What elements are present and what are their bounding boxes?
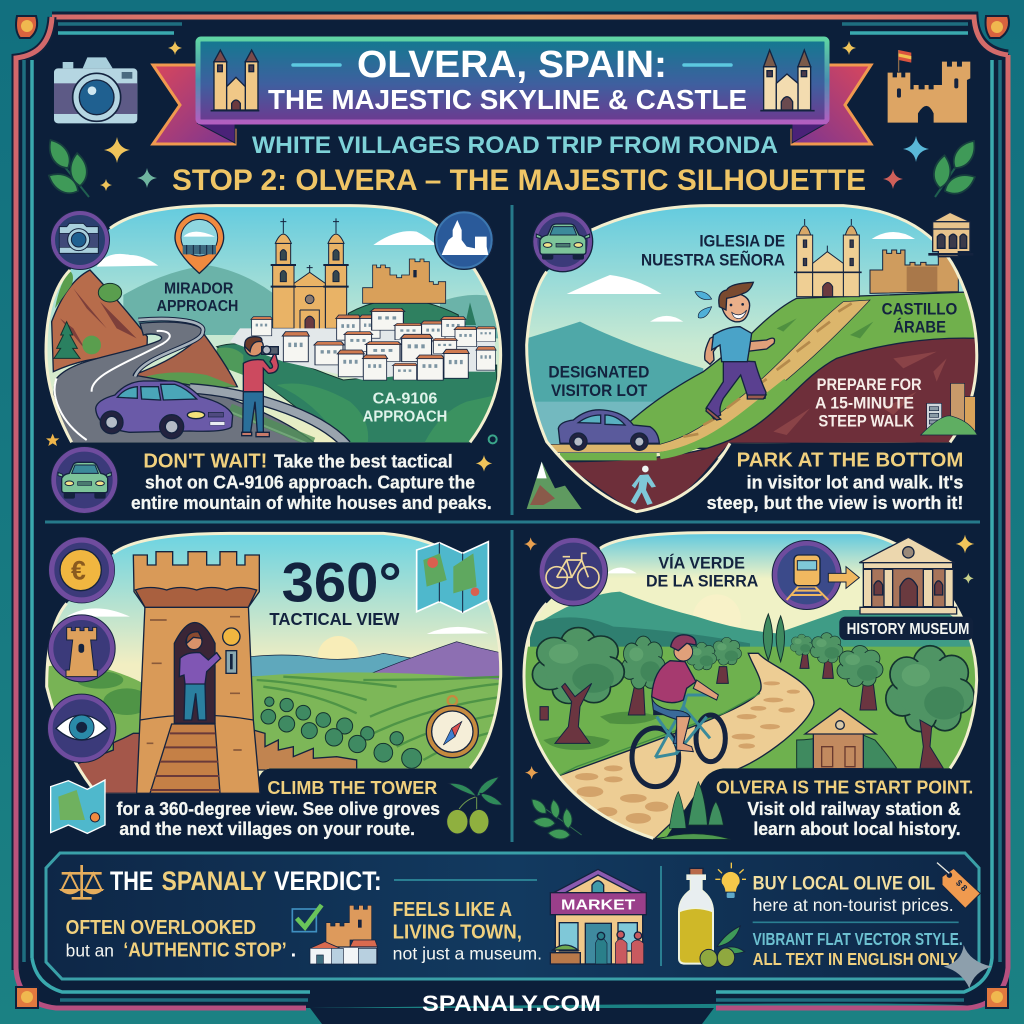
text: buy local olive oil: BUY LOCAL OLIVE OIL: [753, 873, 935, 894]
icon: mountains: [527, 462, 582, 509]
subtitle: WHITE VILLAGES ROAD TRIP FROM RONDA: [252, 132, 778, 159]
panel: Climb the tower: [43, 533, 503, 839]
verdict right content: [550, 863, 992, 988]
caption text: CLIMB THE TOWER: [267, 777, 438, 798]
panel border: [527, 206, 977, 512]
caption text: [131, 451, 492, 513]
label: CA-9106 approach: APPROACH: [363, 409, 447, 426]
icon: compass: [426, 696, 478, 758]
title banner: [198, 39, 827, 122]
text: living town: FEELS LIKE A: [393, 899, 512, 921]
heading: stop 2: STOP 2: OLVERA – THE MAJESTIC SILHOUETTE: [172, 164, 866, 197]
caption text: PARK AT THE BOTTOM: [737, 449, 963, 472]
title line 1: OLVERA, SPAIN:: [357, 44, 667, 86]
icon: price tag: [937, 863, 980, 908]
text: often overlooked: [66, 917, 296, 962]
panel: Park at the bottom: [523, 205, 983, 515]
panel: the Spanaly verdict: [46, 853, 992, 988]
icon: tower badge: [48, 615, 115, 682]
verdict left content: [62, 865, 542, 964]
caption text: Visit old railway station &: [747, 798, 961, 819]
icon: small trees: [657, 782, 731, 839]
icon: buildings: [921, 383, 977, 435]
icon: olive oil bottle: [679, 868, 713, 964]
panel border: [46, 206, 501, 442]
cyclist on bike: [632, 635, 725, 787]
caption text: and the next villages on your route.: [119, 818, 415, 839]
text: living town: not just a museum.: [393, 943, 542, 963]
icon: car badge: [533, 212, 593, 272]
label: mirador approach: MIRADOR: [164, 281, 234, 298]
scene: tower and fields: [43, 533, 503, 796]
labels: church: NUESTRA SEÑORA: [641, 250, 785, 270]
caption text: steep, but the view is worth it!: [707, 492, 963, 513]
text: often overlooked: .: [291, 940, 296, 962]
icon: coin badge: [49, 537, 114, 603]
panel dividers: [45, 205, 980, 842]
caption text: DON'T WAIT!: [143, 451, 267, 473]
labels: steep walk: [815, 376, 922, 431]
text: often overlooked: ‘AUTHENTIC STOP’: [123, 940, 287, 962]
labels: steep walk: PREPARE FOR: [817, 376, 922, 394]
text: buy local olive oil: [753, 873, 954, 915]
icon: castle with flag: [888, 50, 970, 123]
verdict heading: [110, 866, 382, 896]
text: buy local olive oil: here at non-tourist prices.: [753, 895, 954, 915]
icon: skyline badge: [435, 211, 493, 269]
label: via verde: [646, 553, 758, 591]
icon: castle and houses: [310, 905, 377, 964]
panel border: [524, 533, 977, 838]
labels: castle: [882, 300, 958, 337]
label: mirador approach: [157, 281, 238, 315]
tactical view label: TACTICAL VIEW: [269, 609, 399, 629]
caption text: shot on CA-9106 approach. Capture the: [145, 471, 475, 492]
person photographing: [242, 337, 278, 437]
verdict heading: SPANALY: [162, 866, 267, 896]
caption text: in visitor lot and walk. It's: [747, 471, 963, 492]
icon: train badge: [772, 541, 841, 609]
car: blue: [558, 410, 659, 450]
verdict heading: THE: [110, 866, 153, 896]
icon: leaves right: [932, 136, 981, 198]
labels: church: IGLESIA DE: [699, 233, 785, 251]
icon: market: [550, 869, 646, 964]
icon: leaves left: [44, 136, 89, 198]
icon: leaves: [529, 796, 582, 840]
decorations: [46, 434, 497, 472]
icon: church left: [211, 50, 259, 111]
labels: lot: DESIGNATED: [548, 364, 650, 382]
text: style note: ALL TEXT IN ENGLISH ONLY.: [753, 949, 960, 969]
icon: railway station: [805, 708, 876, 769]
icon: coin badge: €: [71, 555, 86, 585]
caption text: [117, 777, 440, 839]
text: often overlooked: but an: [66, 941, 114, 961]
icon: scales: [62, 865, 102, 898]
sparkle: grey star: [944, 945, 992, 988]
caption text: entire mountain of white houses and peaks.: [131, 492, 492, 513]
icon: olives: [447, 777, 503, 834]
icon: bicycle badge: [539, 538, 607, 606]
labels: castle: CASTILLO: [882, 300, 958, 318]
label: mirador pin: [175, 213, 224, 273]
label: via verde: DE LA SIERRA: [646, 572, 758, 591]
scene: hill walk: [523, 205, 983, 515]
sparkles header: [100, 41, 929, 191]
icon: price tag: $ 8: [954, 878, 970, 893]
title line 2: THE MAJESTIC SKYLINE & CASTLE: [268, 84, 747, 115]
labels: steep walk: A 15-MINUTE: [815, 394, 914, 412]
labels: church: [641, 233, 785, 270]
icon: map small: [51, 780, 105, 833]
icon: eye badge: [48, 694, 116, 762]
scene: road and village: [43, 205, 503, 448]
icon: history museum: [859, 537, 957, 614]
caption text: Take the best tactical: [274, 451, 453, 472]
arrow to museum: [828, 567, 859, 588]
labels: castle: ÁRABE: [893, 318, 946, 337]
panel: Via Verde cycling: [523, 532, 983, 847]
footer url: SPANALY.COM: [422, 991, 601, 1016]
caption text: [707, 449, 963, 513]
icon: market: MARKET: [561, 897, 635, 913]
icon: museum tower: [928, 212, 973, 257]
label: CA-9106 approach: [363, 390, 447, 426]
walking man: [695, 282, 775, 420]
tower: [133, 552, 260, 793]
labels: lot: VISITOR LOT: [551, 382, 647, 400]
label: mirador approach: APPROACH: [157, 298, 238, 315]
label: history museum: HISTORY MUSEUM: [847, 621, 969, 638]
icon: camera badge: [51, 211, 109, 269]
text: living town: [393, 899, 542, 963]
icon: olives: [700, 926, 745, 967]
sparkles: [524, 535, 974, 779]
text: style note: [753, 929, 963, 969]
icon: map large: [417, 542, 488, 613]
labels: steep walk: STEEP WALK: [818, 413, 914, 431]
caption text: OLVERA IS THE START POINT.: [716, 776, 973, 797]
ribbon left: [153, 65, 235, 144]
icon: church right: [760, 50, 815, 111]
text: style note: VIBRANT FLAT VECTOR STYLE.: [753, 929, 963, 949]
label: history museum: [839, 617, 973, 640]
label: CA-9106 approach: CA-9106: [373, 390, 437, 407]
caption text: [716, 776, 973, 839]
icon: walker: [631, 466, 656, 505]
icon: light bulb: [715, 863, 746, 898]
car: purple: [96, 381, 233, 439]
text: living town: LIVING TOWN,: [393, 921, 522, 943]
ribbon folds: [197, 123, 827, 143]
panel: Don't wait - CA-9106 approach: [43, 205, 503, 513]
caption text: learn about local history.: [753, 818, 961, 839]
caption text: for a 360-degree view. See olive groves: [117, 798, 440, 819]
big 360 degree label: 360°: [282, 551, 402, 614]
icon: camera: [54, 57, 137, 123]
icon: checkbox: [292, 905, 322, 932]
icon: car badge: [51, 447, 118, 513]
ribbon right: [792, 65, 871, 144]
label: via verde: VÍA VERDE: [658, 553, 745, 572]
labels: lot: [548, 364, 650, 400]
scene: olive grove path: [523, 532, 983, 847]
panel border: [47, 533, 501, 793]
verdict heading: VERDICT:: [274, 866, 382, 896]
text: often overlooked: OFTEN OVERLOOKED: [66, 917, 256, 939]
